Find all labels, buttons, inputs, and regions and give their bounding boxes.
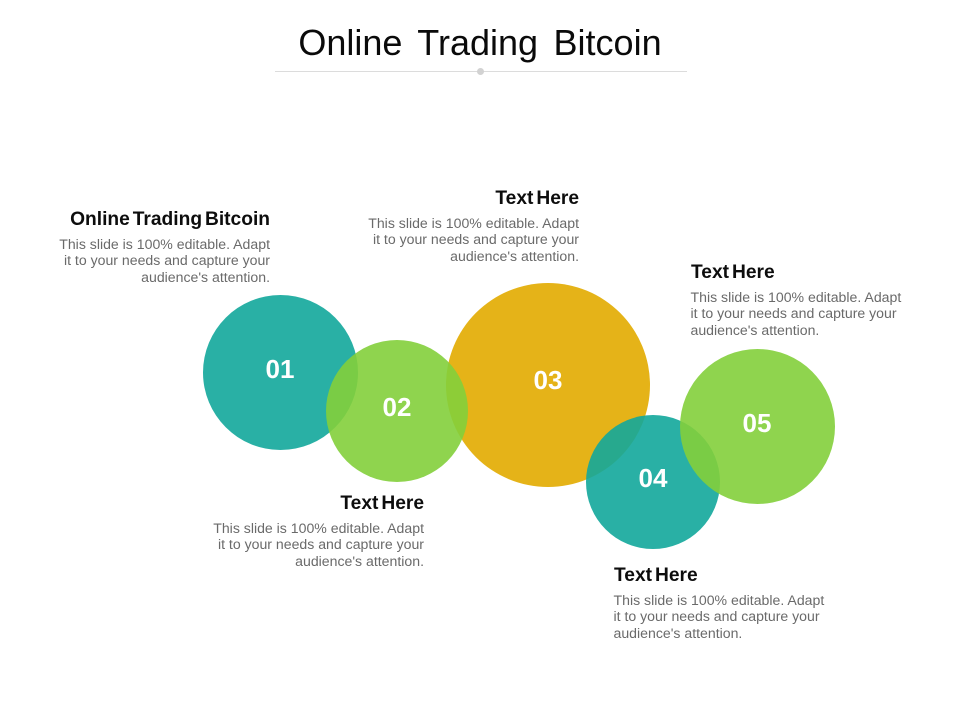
text block 04: [614, 565, 824, 641]
text block 01: it to your needs and capture your: [64, 252, 270, 268]
title divider: [275, 68, 687, 75]
circle 05: [680, 349, 835, 504]
text block 03: This slide is 100% editable. Adapt: [368, 214, 579, 230]
circle 01: 01: [266, 354, 294, 384]
text block 02: it to your needs and capture your: [218, 536, 424, 552]
text block 05: audience's attention.: [690, 322, 819, 338]
text block 02: [213, 493, 424, 569]
text block 04: it to your needs and capture your: [614, 608, 820, 624]
title: Online Trading Bitcoin: [298, 22, 662, 63]
circle 03: 03: [534, 365, 562, 395]
text block 05: This slide is 100% editable. Adapt: [690, 288, 901, 304]
circle 04: [586, 415, 720, 549]
text block 04: This slide is 100% editable. Adapt: [614, 592, 824, 608]
text block 03: audience's attention.: [450, 248, 579, 264]
text block 02: This slide is 100% editable. Adapt: [213, 520, 424, 536]
text block 02: Text Here: [340, 493, 424, 514]
text block 04: audience's attention.: [614, 625, 742, 641]
circle 02: 02: [383, 392, 411, 422]
text block 01: Online Trading Bitcoin: [70, 209, 270, 230]
text block 01: This slide is 100% editable. Adapt: [59, 236, 270, 252]
circle 03: [446, 283, 650, 487]
text block 01: [59, 209, 270, 285]
text block 05: [690, 262, 902, 338]
text block 02: audience's attention.: [295, 553, 424, 569]
circle 02: [326, 340, 468, 482]
text block 03: [368, 188, 579, 264]
circle 05: 05: [743, 408, 771, 438]
text block 04: Text Here: [614, 565, 698, 586]
text block 01: audience's attention.: [141, 269, 270, 285]
circle 01: [203, 295, 358, 450]
text block 05: Text Here: [691, 262, 775, 283]
text block 05: it to your needs and capture your: [690, 305, 897, 321]
text block 03: it to your needs and capture your: [373, 231, 579, 247]
circle 04: 04: [639, 463, 668, 493]
text block 03: Text Here: [495, 188, 579, 209]
